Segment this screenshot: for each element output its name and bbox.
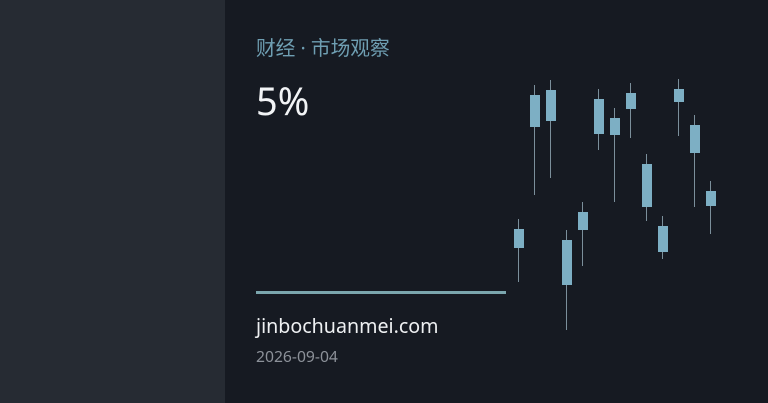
candle 2 <box>530 85 540 195</box>
candle 6 <box>594 89 604 150</box>
candle 4 <box>562 230 572 330</box>
headline value: 5%: 5% <box>256 75 309 127</box>
candle 5 <box>578 202 588 266</box>
candle 7 <box>610 108 620 202</box>
date: 2026-09-04 <box>256 345 338 367</box>
candle 1 <box>514 219 524 282</box>
candle 8 <box>626 83 636 138</box>
panel: left sidebar <box>0 0 225 403</box>
candle 3 <box>546 80 556 178</box>
category heading: 财经 · 市场观察 <box>256 34 390 61</box>
candle 9 <box>642 154 652 221</box>
candle 10 <box>658 216 668 259</box>
site name: jinbochuanmei.com <box>256 312 439 339</box>
accent divider line <box>256 291 506 294</box>
candle 13 <box>706 181 716 234</box>
candle 12 <box>690 115 700 207</box>
candle 11 <box>674 79 684 136</box>
